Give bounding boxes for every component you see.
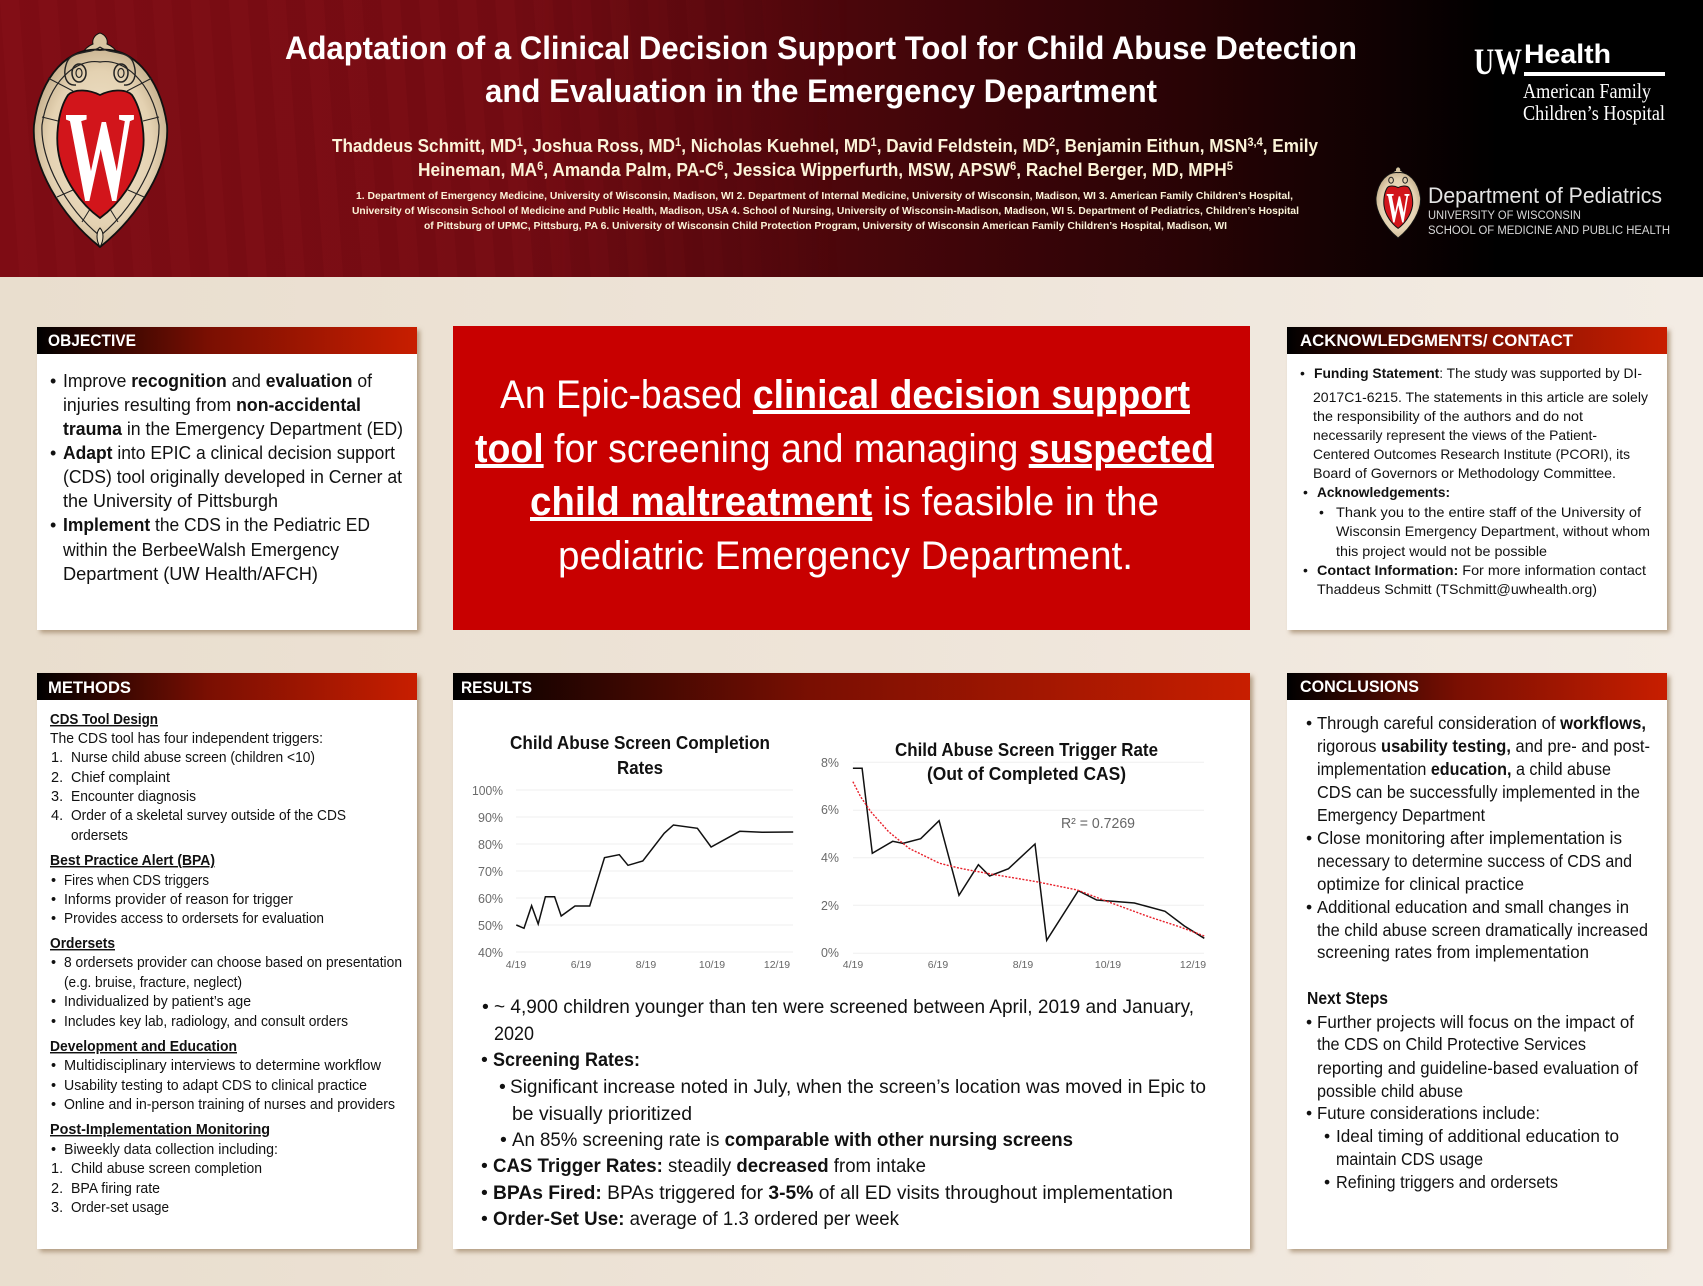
callout: key finding: child maltreatment is feasible in the <box>530 480 1159 524</box>
heading: results: RESULTS <box>461 678 532 697</box>
panel: objective <box>37 327 417 630</box>
text block: next steps: • <box>1306 1012 1312 1032</box>
line chart: screen completion rates: 50% <box>478 918 503 933</box>
authors: , David Feldstein, MD <box>877 135 1049 156</box>
text block: conclusions bullets: screening rates from implementation <box>1317 942 1589 962</box>
authors: 6 <box>717 159 724 173</box>
authors: 1 <box>675 135 681 149</box>
text block: conclusions bullets: Close monitoring after implementation is <box>1317 828 1622 848</box>
text block: post-implementation monitoring: Order-set usage <box>71 1200 169 1216</box>
text block: objective bullets: Adapt into EPIC a clinical decision support <box>63 443 395 463</box>
title: Adaptation of a Clinical Decision Support Tool for Child Abuse Detection <box>285 30 1357 66</box>
text block: development and education: Development and Education <box>50 1039 237 1055</box>
chart title: trigger rate: Child Abuse Screen Trigger Rate <box>895 739 1158 760</box>
text block: best practice alert: Provides access to ordersets for evaluation <box>64 911 324 927</box>
authors: , Emily <box>1263 135 1319 156</box>
heading: acknowledgments: ACKNOWLEDGMENTS/ CONTACT <box>1300 331 1574 350</box>
text block: results bullets: • <box>481 1155 488 1177</box>
text block: CDS tool design: The CDS tool has four independent triggers: <box>50 731 323 747</box>
line chart: screen trigger rate: 4/19 <box>843 959 863 971</box>
text block: results bullets: • <box>481 1049 488 1071</box>
chart title: completion rates: Child Abuse Screen Completion <box>510 732 770 753</box>
line chart: screen completion rates: 8/19 <box>636 959 656 971</box>
text block: ordersets: • <box>51 955 56 971</box>
text block: post-implementation monitoring: 3. <box>51 1200 63 1216</box>
text block: CDS tool design: CDS Tool Design <box>50 712 158 728</box>
text block: results bullets: ~ 4,900 children younger than ten were screened between April, 2019 and January, <box>494 996 1194 1018</box>
line chart: screen trigger rate: R² = 0.7269 <box>1061 816 1135 832</box>
affiliations: University of Wisconsin School of Medicine and Public Health, Madison, USA 4. School of Nursing, University of Wisconsin-Madison, Madison, WI 5. Department of Pediatrics, Children’s Hospital <box>352 205 1299 217</box>
text block: acknowledgments: • <box>1303 484 1308 500</box>
text block: post-implementation monitoring: Child abuse screen completion <box>71 1161 262 1177</box>
authors: 2 <box>1049 135 1055 149</box>
text block: objective bullets: trauma in the Emergency Department (ED) <box>63 419 403 439</box>
panel: results <box>453 673 1250 1249</box>
logo: UW Health American Family Children's Hospital: Health <box>1524 39 1611 69</box>
authors: 1 <box>517 135 523 149</box>
line chart: screen completion rates <box>472 732 793 971</box>
authors: Heineman, MA <box>418 159 545 180</box>
text block: acknowledgments: • <box>1303 562 1308 578</box>
authors: 3,4 <box>1247 135 1263 149</box>
text block: objective bullets <box>50 371 403 584</box>
text block: next steps: Further projects will focus on the impact of <box>1317 1012 1634 1032</box>
line chart: screen trigger rate: 8/19 <box>1013 959 1033 971</box>
line chart: screen completion rates: 90% <box>478 810 503 825</box>
text block: next steps: • <box>1306 1103 1312 1123</box>
text block: best practice alert: • <box>51 911 56 927</box>
text block: CDS tool design: Order of a skeletal survey outside of the CDS <box>71 808 346 824</box>
icon: university crest: W <box>65 85 135 227</box>
text block: objective bullets: the University of Pittsburgh <box>63 491 278 511</box>
heading: conclusions <box>1287 673 1667 700</box>
affiliations: of Pittsburg of UPMC, Pittsburg, PA 6. University of Wisconsin Child Protection Program, University of Wisconsin American Family Children’s Hospital, Madison, WI <box>424 220 1227 232</box>
line chart: screen trigger rate: 12/19 <box>1180 959 1206 971</box>
text block: objective bullets: • <box>50 371 56 391</box>
text block: acknowledgments: • <box>1300 365 1305 381</box>
text block: results bullets: An 85% screening rate is comparable with other nursing screens <box>512 1129 1073 1151</box>
text block: CDS tool design: Nurse child abuse screen (children <10) <box>71 750 315 766</box>
text block: conclusions bullets: necessary to determine success of CDS and <box>1317 851 1632 871</box>
logo: UW Health American Family Children's Hospital: UW <box>1474 42 1522 83</box>
text block: development and education: Online and in-person training of nurses and providers <box>64 1097 395 1113</box>
text block: conclusions bullets: Additional education and small changes in <box>1317 897 1629 917</box>
affiliations <box>352 190 1299 232</box>
heading: methods <box>37 673 417 700</box>
text block: conclusions bullets: • <box>1306 713 1312 733</box>
text block: conclusions bullets: • <box>1306 897 1312 917</box>
callout: key finding: tool for screening and managing suspected <box>475 427 1214 471</box>
text block: acknowledgments: Contact Information: For more information contact <box>1317 562 1646 578</box>
line chart: screen trigger rate: 10/19 <box>1095 959 1121 971</box>
heading: results <box>453 673 1250 700</box>
authors: Thaddeus Schmitt, MD <box>332 135 531 156</box>
logo: Department of Pediatrics: Department of Pediatrics <box>1428 183 1662 208</box>
line chart: screen completion rates: 60% <box>478 891 503 906</box>
text block: results bullets: 2020 <box>494 1023 534 1045</box>
text block: objective bullets: • <box>50 443 56 463</box>
chart title: trigger rate <box>895 739 1158 784</box>
text block: conclusions bullets <box>1306 713 1650 962</box>
line chart: screen trigger rate: 6% <box>821 802 839 817</box>
text block: results bullets: • <box>499 1076 506 1098</box>
text block: conclusions bullets: rigorous usability testing, and pre- and post- <box>1317 736 1650 756</box>
line chart: screen completion rates: 10/19 <box>699 959 725 971</box>
authors: , Benjamin Eithun, MSN <box>1055 135 1247 156</box>
text block: acknowledgments: 2017C1-6215. The statements in this article are solely <box>1313 389 1648 405</box>
logo: UW Health American Family Children's Hospital: American Family <box>1523 79 1651 103</box>
text block: CDS tool design: Encounter diagnosis <box>71 789 196 805</box>
text block: conclusions bullets: Emergency Department <box>1317 805 1485 825</box>
line chart: screen trigger rate: 6/19 <box>928 959 948 971</box>
line chart: screen completion rates: 70% <box>478 864 503 879</box>
text block: next steps: Future considerations include: <box>1317 1103 1540 1123</box>
text block: results bullets: be visually prioritized <box>512 1103 692 1125</box>
text block: ordersets: Ordersets <box>50 936 115 952</box>
text block: acknowledgments: Centered Outcomes Research Institute (PCORI), its <box>1313 446 1630 462</box>
text block: post-implementation monitoring: 2. <box>51 1181 63 1197</box>
text block: results bullets: Significant increase noted in July, when the screen’s location was moved in Epic to <box>510 1076 1206 1098</box>
text block: next steps: Ideal timing of additional education to <box>1336 1126 1619 1146</box>
text block: conclusions bullets: implementation education, a child abuse <box>1317 759 1611 779</box>
text block: conclusions bullets: Through careful consideration of workflows, <box>1317 713 1646 733</box>
text block: results bullets: Screening Rates: <box>493 1049 640 1071</box>
authors: 5 <box>1227 159 1233 173</box>
text block: CDS tool design: ordersets <box>71 828 128 844</box>
text block: objective bullets: within the BerbeeWalsh Emergency <box>62 540 339 560</box>
text block: results bullets: Order-Set Use: average of 1.3 ordered per week <box>493 1208 899 1230</box>
text block: acknowledgments: Acknowledgements: <box>1317 484 1450 500</box>
text block: acknowledgments: Funding Statement: The study was supported by DI- <box>1314 365 1642 381</box>
text block: next steps: reporting and guideline-based evaluation of <box>1317 1058 1638 1078</box>
text block: results bullets: • <box>500 1129 507 1151</box>
text block: ordersets: • <box>51 994 56 1010</box>
line chart: screen completion rates: 4/19 <box>506 959 526 971</box>
line chart: screen trigger rate: 0% <box>821 945 839 960</box>
line chart: screen trigger rate: 8% <box>821 755 839 770</box>
callout: key finding: An Epic-based clinical decision support <box>500 373 1190 417</box>
text block: ordersets: Individualized by patient’s age <box>64 994 251 1010</box>
text block: CDS tool design: Chief complaint <box>71 770 170 786</box>
text block: objective bullets: (CDS) tool originally developed in Cerner at <box>63 467 402 487</box>
text block: best practice alert: Fires when CDS triggers <box>64 873 209 889</box>
text block: next steps: Refining triggers and ordersets <box>1336 1172 1558 1192</box>
text block: next steps: the CDS on Child Protective Services <box>1317 1034 1586 1054</box>
text block: conclusions bullets: the child abuse screen dramatically increased <box>1317 920 1648 940</box>
text block: objective bullets: Department (UW Health/AFCH) <box>63 564 318 584</box>
authors: 6 <box>537 159 544 173</box>
text block: best practice alert <box>50 853 324 927</box>
text block: post-implementation monitoring: • <box>51 1142 56 1158</box>
text block: conclusions bullets: CDS can be successfully implemented in the <box>1317 782 1640 802</box>
text block: results bullets <box>481 996 1206 1230</box>
text block: development and education <box>50 1039 395 1113</box>
text block: conclusions bullets: • <box>1306 828 1312 848</box>
heading: conclusions: CONCLUSIONS <box>1300 677 1419 696</box>
chart title: completion rates: Rates <box>617 757 663 778</box>
heading: methods: METHODS <box>48 678 131 697</box>
text block: next steps <box>1306 988 1638 1192</box>
text block: post-implementation monitoring: Post-Implementation Monitoring <box>50 1122 270 1138</box>
text block: ordersets <box>50 936 402 1030</box>
logo: UW Health American Family Children's Hospital <box>1474 39 1665 125</box>
text block: results bullets: • <box>481 1208 488 1230</box>
panel: methods <box>37 673 417 1249</box>
text block: objective bullets: Implement the CDS in the Pediatric ED <box>63 515 370 535</box>
authors <box>332 135 1319 180</box>
text block: ordersets: 8 ordersets provider can choose based on presentation <box>64 955 402 971</box>
logo: UW Health American Family Children's Hospital: Children’s Hospital <box>1523 101 1665 125</box>
text block: objective bullets: injuries resulting from non-accidental <box>63 395 361 415</box>
text block: ordersets: • <box>51 1014 56 1030</box>
authors: , Joshua Ross, MD <box>523 135 675 156</box>
text block: objective bullets: Improve recognition and evaluation of <box>63 371 373 391</box>
text block: ordersets: (e.g. bruise, fracture, neglect) <box>64 975 242 991</box>
text block: post-implementation monitoring: 1. <box>51 1161 63 1177</box>
text block: best practice alert: Informs provider of reason for trigger <box>64 892 293 908</box>
text block: CDS tool design: 3. <box>51 789 63 805</box>
text block: acknowledgments: Thaddeus Schmitt (TSchmitt@uwhealth.org) <box>1317 581 1597 597</box>
text block: post-implementation monitoring <box>50 1122 278 1216</box>
text block: post-implementation monitoring: Biweekly data collection including: <box>64 1142 278 1158</box>
callout: key finding: pediatric Emergency Department. <box>558 534 1133 578</box>
callout: key finding <box>453 326 1250 630</box>
text block: best practice alert: • <box>51 873 56 889</box>
authors: , Jessica Wipperfurth, MSW, APSW <box>724 159 1011 180</box>
authors: , Amanda Palm, PA-C <box>543 159 717 180</box>
authors: 1 <box>871 135 877 149</box>
line chart: screen trigger rate: 4% <box>821 850 839 865</box>
text block: ordersets: Includes key lab, radiology, and consult orders <box>64 1014 348 1030</box>
text block: acknowledgments: Wisconsin Emergency Department, without whom <box>1336 523 1650 539</box>
line chart: screen trigger rate <box>821 739 1206 971</box>
logo: Department of Pediatrics: W <box>1386 185 1410 232</box>
heading: acknowledgments <box>1287 327 1667 354</box>
chart title: trigger rate: (Out of Completed CAS) <box>927 763 1126 784</box>
text block: post-implementation monitoring: BPA firing rate <box>71 1181 160 1197</box>
text block: development and education: • <box>51 1058 56 1074</box>
text block: CDS tool design <box>50 712 346 844</box>
line chart: screen completion rates: 40% <box>478 945 503 960</box>
panel: conclusions <box>1287 673 1667 1249</box>
text block: CDS tool design: 4. <box>51 808 63 824</box>
text block: results bullets: • <box>481 1182 488 1204</box>
text block: development and education: • <box>51 1078 56 1094</box>
panel: acknowledgments and contact <box>1287 327 1667 630</box>
text block: next steps: Next Steps <box>1307 988 1388 1008</box>
title: and Evaluation in the Emergency Department <box>485 73 1157 109</box>
line chart: screen completion rates: 100% <box>472 783 503 798</box>
authors: , Rachel Berger, MD, MPH <box>1016 159 1227 180</box>
authors: 6 <box>1010 159 1017 173</box>
line chart: screen completion rates: 12/19 <box>764 959 790 971</box>
text block: acknowledgments: the responsibility of the authors and do not <box>1313 408 1583 424</box>
text block: acknowledgments: • <box>1319 504 1324 520</box>
text block: development and education: • <box>51 1097 56 1113</box>
text block: development and education: Multidisciplinary interviews to determine workflow <box>64 1058 382 1074</box>
logo: Department of Pediatrics: UNIVERSITY OF WISCONSIN <box>1428 210 1581 222</box>
logo: Department of Pediatrics: SCHOOL OF MEDICINE AND PUBLIC HEALTH <box>1428 225 1670 237</box>
text block: next steps: maintain CDS usage <box>1336 1149 1483 1169</box>
text block: best practice alert: Best Practice Alert (BPA) <box>50 853 215 869</box>
line chart: screen trigger rate: 2% <box>821 898 839 913</box>
text block: acknowledgments: Board of Governors or Methodology Committee. <box>1313 465 1616 481</box>
text block: CDS tool design: 2. <box>51 770 63 786</box>
logo: Department of Pediatrics <box>1376 167 1670 238</box>
text block: acknowledgments <box>1300 365 1650 597</box>
text block: CDS tool design: 1. <box>51 750 63 766</box>
text block: objective bullets: • <box>50 515 56 535</box>
title <box>285 30 1357 109</box>
heading: objective <box>37 327 417 354</box>
text block: results bullets: BPAs Fired: BPAs triggered for 3-5% of all ED visits throughout implementation <box>493 1182 1173 1204</box>
text block: development and education: Usability testing to adapt CDS to clinical practice <box>64 1078 367 1094</box>
text block: next steps: possible child abuse <box>1317 1081 1463 1101</box>
line chart: screen completion rates: 80% <box>478 837 503 852</box>
text block: results bullets: • <box>482 996 489 1018</box>
heading: objective: OBJECTIVE <box>48 331 136 350</box>
affiliations: 1. Department of Emergency Medicine, University of Wisconsin, Madison, WI 2. Department of Internal Medicine, University of Wisconsin, Madison, WI 3. American Family Children’s Hospital, <box>356 190 1293 202</box>
text block: acknowledgments: necessarily represent the views of the Patient- <box>1313 427 1597 443</box>
text block: next steps: • <box>1324 1172 1330 1192</box>
text block: conclusions bullets: optimize for clinical practice <box>1317 874 1524 894</box>
text block: best practice alert: • <box>51 892 56 908</box>
header banner <box>0 0 1703 277</box>
authors: , Nicholas Kuehnel, MD <box>681 135 871 156</box>
line chart: screen completion rates: 6/19 <box>571 959 591 971</box>
text block: next steps: • <box>1324 1126 1330 1146</box>
text block: results bullets: CAS Trigger Rates: steadily decreased from intake <box>493 1155 926 1177</box>
text block: acknowledgments: this project would not be possible <box>1336 543 1547 559</box>
icon: university crest <box>34 33 167 247</box>
chart title: completion rates <box>510 732 770 778</box>
text block: acknowledgments: Thank you to the entire staff of the University of <box>1336 504 1641 520</box>
